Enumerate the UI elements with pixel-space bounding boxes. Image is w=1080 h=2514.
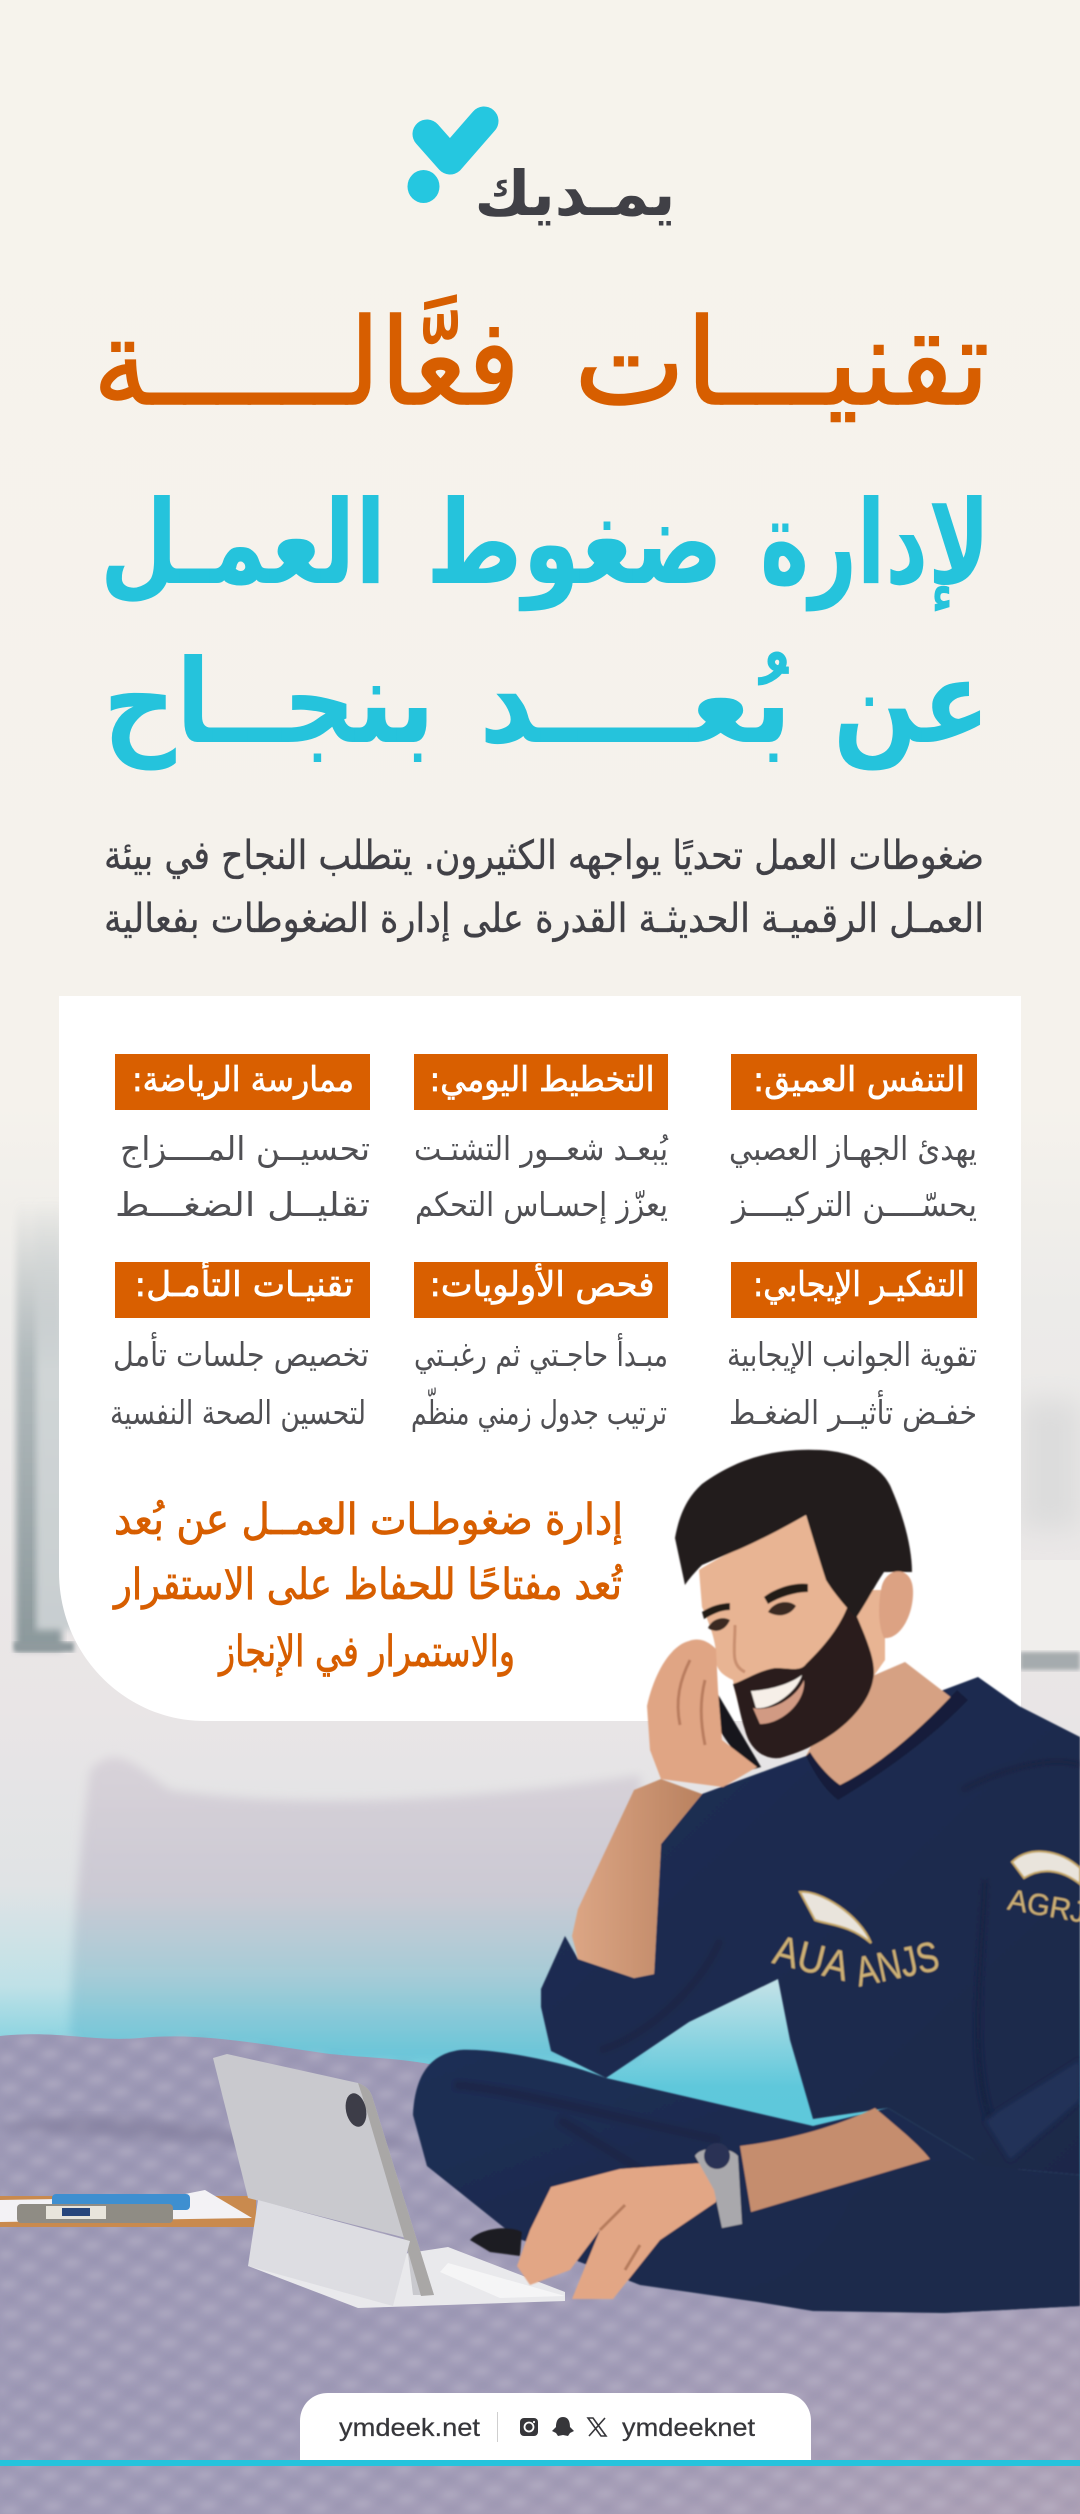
icon: dot bbox=[408, 170, 440, 203]
beard bbox=[733, 1600, 874, 1758]
foot shadow bbox=[470, 2228, 522, 2256]
wrist watch bbox=[695, 2148, 742, 2228]
tip: positive thinking: التفكيـر الإيجابي: bbox=[753, 1265, 965, 1305]
intro paragraph: العمـل الرقميـة الحديثـة القدرة على إدارة الضغوطات بفعالية bbox=[104, 896, 984, 942]
panel: white content card bbox=[59, 996, 1021, 1721]
title line 2 word: ضغوط: ضغوط bbox=[426, 476, 723, 612]
trouser folds bbox=[455, 2085, 720, 2200]
bed with chenille texture bbox=[0, 2034, 1080, 2514]
lower forearm bbox=[740, 2108, 930, 2212]
sweatshirt bbox=[541, 1677, 1080, 2175]
tip: daily planning: يعزّز إحسـاس التحكم bbox=[415, 1185, 668, 1225]
social handle: ymdeeknet bbox=[622, 2414, 755, 2442]
tip: exercise bbox=[115, 1054, 370, 1224]
divider bbox=[497, 2412, 498, 2442]
hand on keyboard bbox=[517, 2162, 716, 2299]
title line 2 word: لإدارة: لإدارة bbox=[760, 476, 990, 612]
jaguar chest logo bbox=[800, 1892, 871, 1943]
intro paragraph bbox=[104, 833, 984, 942]
finger lines bbox=[678, 1660, 705, 1745]
tip: exercise: تقليــل الضغـــط bbox=[115, 1185, 370, 1224]
tablet on keyboard stand bbox=[213, 2054, 565, 2308]
sweatshirt folds bbox=[600, 1762, 1080, 2120]
ear bbox=[879, 1571, 913, 1638]
raised forearm bbox=[572, 1779, 702, 1978]
chest lettering bbox=[769, 1884, 1080, 1996]
tip: meditation: لتحسين الصحة النفسية bbox=[110, 1393, 366, 1432]
tip: priorities: فحص الأولويات: bbox=[430, 1263, 654, 1305]
tip: positive thinking: تقوية الجوانب الإيجابية bbox=[727, 1335, 977, 1374]
tip: exercise: تحسيــن المــــزاج bbox=[120, 1129, 370, 1169]
eyes bbox=[708, 1602, 796, 1631]
icon: snapchat bbox=[552, 2417, 574, 2436]
blurred room: picture frame, wall strip and pillow bbox=[14, 1200, 1080, 2060]
tip: deep breathing: يحسّــــن التركيــــز bbox=[730, 1185, 977, 1224]
tip: priorities: ترتيب جدول زمني منظّم bbox=[411, 1388, 667, 1432]
tip: exercise: ممارسة الرياضة: bbox=[132, 1060, 354, 1100]
tip: daily planning: يُبعـد شعــور التشتـت bbox=[414, 1129, 668, 1168]
neck bbox=[806, 1662, 957, 1794]
icon: instagram bbox=[520, 2418, 538, 2436]
teal footer line bbox=[0, 2460, 1080, 2466]
chest lettering: AUA bbox=[769, 1926, 854, 1990]
logo bbox=[408, 121, 676, 230]
photo: man on phone working at tablet bbox=[413, 1450, 1080, 2313]
tip: positive thinking bbox=[727, 1262, 977, 1433]
title bbox=[93, 294, 990, 771]
logo wordmark: يمـديك bbox=[474, 157, 676, 230]
callout: orange statement: إدارة ضغوطـات العمــل عن بُعد bbox=[114, 1495, 623, 1545]
callout: orange statement: والاستمرار في الإنجاز bbox=[217, 1627, 515, 1677]
front knee bbox=[760, 2159, 1080, 2313]
finger gaps bbox=[600, 2205, 640, 2270]
title line 3 word: بنجاح: بنجــاح bbox=[103, 635, 435, 770]
head skin bbox=[699, 1515, 885, 1758]
tip: meditation: تقنيـات التأمـل: bbox=[134, 1261, 354, 1305]
tip: deep breathing: التنفس العميق: bbox=[753, 1060, 965, 1100]
jaguar sleeve logo bbox=[1012, 1852, 1080, 1884]
icon: X bbox=[588, 2418, 606, 2436]
smile teeth bbox=[751, 1675, 802, 1708]
trousers bbox=[413, 2050, 1080, 2313]
tip: deep breathing bbox=[729, 1054, 977, 1224]
desk items: clipboard, paper and pens bbox=[0, 2190, 256, 2227]
title line 3 word: عن: عن bbox=[833, 635, 990, 771]
eyebrows bbox=[702, 1584, 808, 1619]
lower lip bbox=[753, 1680, 804, 1724]
icon: check mark bbox=[427, 121, 484, 160]
tip: meditation bbox=[110, 1261, 370, 1432]
hand at ear bbox=[647, 1640, 757, 1787]
title line 1 word: فعالة: فعَّالــــــة bbox=[93, 294, 520, 433]
footer contact tab bbox=[300, 2393, 811, 2460]
tip: meditation: تخصيص جلسات تأمل bbox=[113, 1332, 369, 1375]
title line 3 word: بعد: بُعــــد bbox=[479, 635, 792, 770]
callout: orange statement bbox=[112, 1495, 623, 1677]
tip: daily planning bbox=[414, 1054, 668, 1225]
title line 2 word: العمل: العمـل bbox=[100, 476, 386, 611]
rib collar bbox=[806, 1690, 968, 1800]
phone bbox=[716, 1691, 761, 1771]
tip: positive thinking: خفـض تأثيــر الضغـط bbox=[729, 1390, 977, 1433]
nose shade bbox=[734, 1625, 745, 1672]
tip: daily planning: التخطيط اليومي: bbox=[430, 1060, 654, 1100]
tip: deep breathing: يهدئ الجهـاز العصبي bbox=[729, 1129, 977, 1168]
website: ymdeek.net bbox=[339, 2414, 480, 2442]
tip: priorities bbox=[411, 1262, 668, 1432]
tip: priorities: مبـدأ حاجـتي ثم رغبـتي bbox=[414, 1333, 668, 1374]
hair bbox=[675, 1450, 912, 1618]
chest lettering: ANJS bbox=[851, 1932, 943, 1996]
callout: orange statement: تُعد مفتاحًا للحفاظ على الاستقرار bbox=[112, 1560, 622, 1610]
title line 1 word: تقنيات: تقنيـــات bbox=[574, 294, 990, 433]
